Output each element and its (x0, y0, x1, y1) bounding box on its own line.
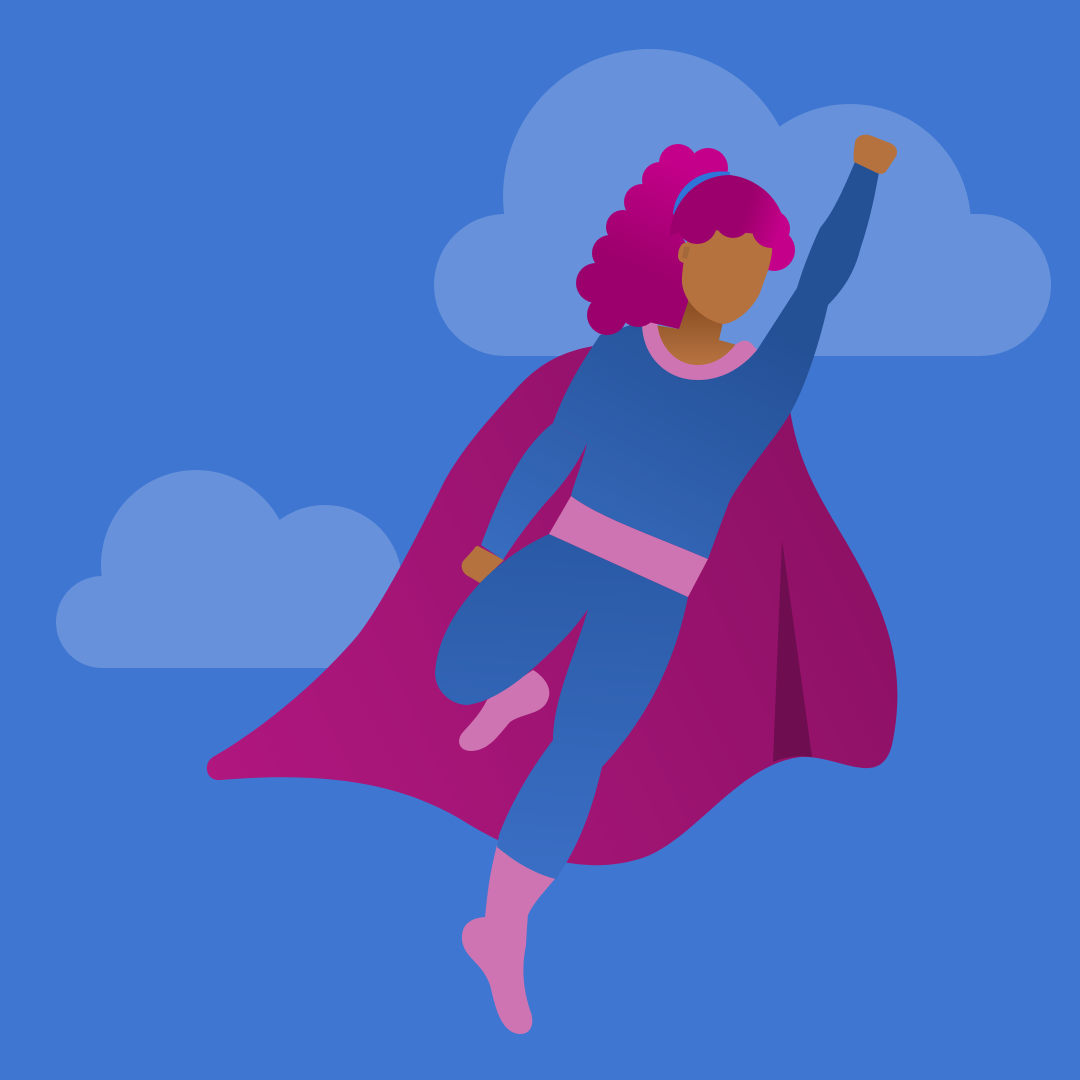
cloud: small left (56, 470, 402, 668)
hair front (670, 175, 790, 248)
hair lower right curl (753, 229, 795, 271)
belt (549, 496, 708, 597)
rear boot (459, 670, 549, 751)
cape fold (773, 540, 812, 762)
ear (678, 243, 693, 263)
raised fist (854, 135, 897, 174)
cloud: large right (434, 49, 1051, 356)
cape (207, 345, 897, 865)
front leg (435, 534, 688, 879)
face (682, 225, 773, 324)
back arm (481, 423, 587, 560)
collar (642, 320, 757, 380)
front boot (462, 845, 558, 1034)
hair back curls (576, 144, 728, 335)
neck (655, 295, 737, 368)
headband (673, 172, 730, 220)
back hand (462, 546, 504, 583)
torso and raised arm (553, 162, 879, 559)
